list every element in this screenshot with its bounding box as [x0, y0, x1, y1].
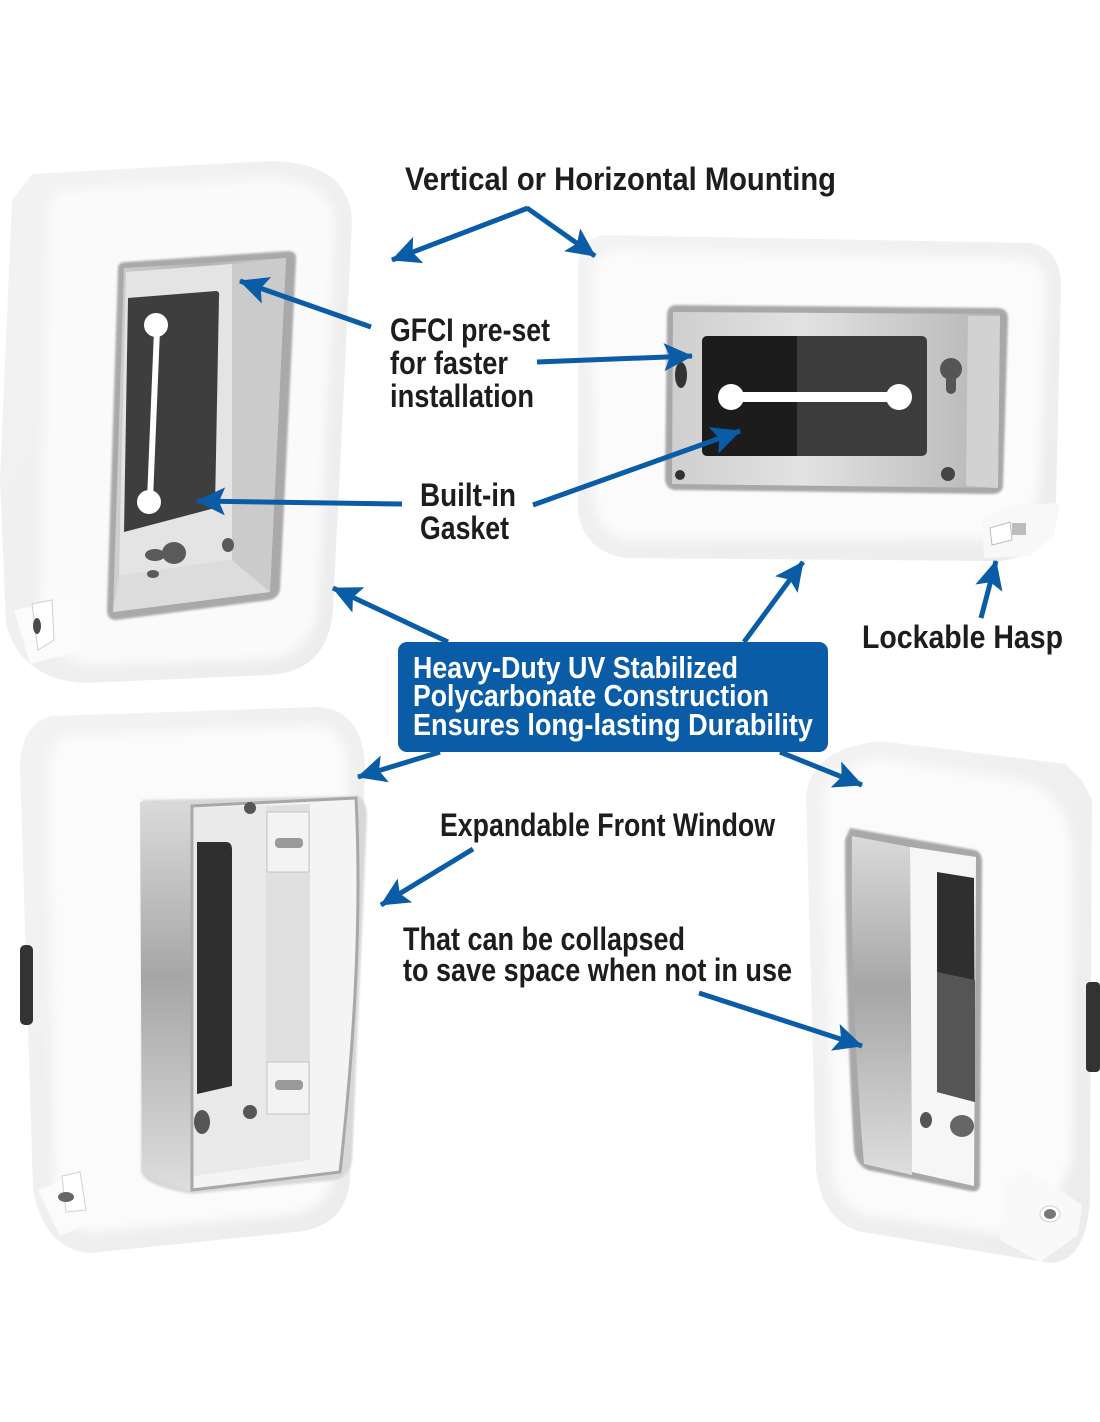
- heading: mounting: Vertical or Horizontal Mounting: [405, 161, 836, 197]
- product: vertical cover, window expanded: [20, 707, 367, 1253]
- label: collapsed: That can be collapsed: [403, 921, 685, 957]
- product: angled cover, window expanded: [806, 741, 1100, 1263]
- arrows: gasket: [197, 431, 740, 505]
- label: GFCI pre-set: [390, 312, 550, 414]
- callout: construction: Ensures long-lasting Durability: [413, 707, 814, 742]
- arrow: hasp: [981, 561, 996, 618]
- label: collapsed: to save space when not in use: [403, 952, 792, 988]
- label: gasket: [420, 477, 516, 546]
- callout: construction: [398, 642, 828, 752]
- callout: construction: Heavy-Duty UV Stabilized: [413, 650, 738, 685]
- label: gasket: Gasket: [420, 510, 509, 546]
- arrows: GFCI: [240, 281, 692, 362]
- label: collapsed: [403, 921, 792, 988]
- label: expandable window: Expandable Front Window: [440, 807, 775, 843]
- arrow: collapsed: [699, 993, 862, 1046]
- callout: construction: Polycarbonate Construction: [413, 678, 769, 713]
- product: horizontal cover, open front: [578, 235, 1061, 561]
- arrows: callout: [333, 562, 862, 785]
- label: lockable hasp: Lockable Hasp: [862, 619, 1063, 655]
- arrows: mounting: [392, 208, 595, 260]
- arrow: expandable window: [381, 849, 473, 905]
- label: GFCI pre-set: installation: [390, 378, 534, 414]
- label: gasket: Built-in: [420, 477, 516, 513]
- label: GFCI pre-set: for faster: [390, 345, 508, 381]
- label: GFCI pre-set: GFCI pre-set: [390, 312, 550, 348]
- product: vertical cover, open front: [0, 161, 352, 683]
